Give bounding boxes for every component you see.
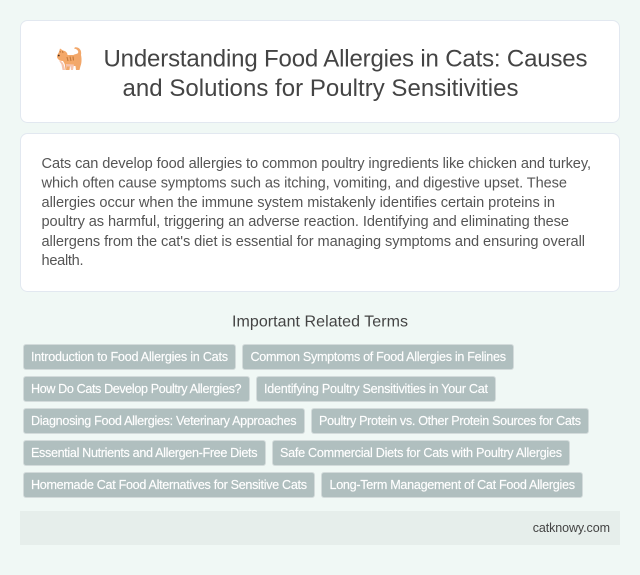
chip: Identifying Poultry Sensitivities in Your Cat	[264, 382, 488, 396]
description text: allergies occur when the immune system mistakenly identifies certain proteins in	[42, 195, 555, 211]
chip: Poultry Protein vs. Other Protein Sources for Cats	[319, 414, 581, 428]
description text: allergens from the cat's diet is essential for managing symptoms and ensuring overall	[42, 234, 585, 250]
description text: Cats can develop food allergies to common poultry ingredients like chicken and turkey,	[42, 156, 591, 172]
chip: Essential Nutrients and Allergen-Free Diets	[31, 446, 258, 460]
title line 1: Understanding Food Allergies in Cats: Causes	[104, 46, 588, 72]
panel: title card	[20, 20, 620, 122]
chip	[24, 472, 314, 498]
chip: Safe Commercial Diets for Cats with Poultry Allergies	[280, 446, 562, 460]
chip	[24, 408, 304, 434]
chip: Common Symptoms of Food Allergies in Felines	[250, 350, 506, 364]
related terms chips	[24, 344, 588, 498]
chip	[272, 440, 570, 466]
chip	[242, 344, 514, 370]
chip	[322, 472, 582, 498]
chip: Homemade Cat Food Alternatives for Sensitive Cats	[31, 478, 307, 492]
chip	[256, 376, 496, 402]
title line 2: and Solutions for Poultry Sensitivities	[122, 75, 518, 102]
description text	[40, 156, 591, 269]
panel: description card	[20, 134, 620, 292]
chip: Long-Term Management of Cat Food Allergies	[330, 478, 575, 492]
description text: which often cause symptoms such as itching, vomiting, and digestive upset. These	[40, 176, 567, 192]
chip	[24, 376, 250, 402]
chip: Introduction to Food Allergies in Cats	[31, 350, 228, 364]
description text: health.	[42, 253, 84, 269]
footer site name: catknowy.com	[533, 521, 610, 535]
icon: cat	[57, 47, 82, 70]
chip	[24, 440, 266, 466]
footer	[20, 511, 620, 545]
heading: important related terms: Important Related Terms	[232, 314, 408, 330]
chip	[24, 344, 236, 370]
chip: How Do Cats Develop Poultry Allergies?	[31, 382, 242, 396]
description text: poultry as harmful, triggering an adverse reaction. Identifying and eliminating these	[42, 214, 569, 230]
chip	[312, 408, 588, 434]
chip: Diagnosing Food Allergies: Veterinary Approaches	[31, 414, 296, 428]
